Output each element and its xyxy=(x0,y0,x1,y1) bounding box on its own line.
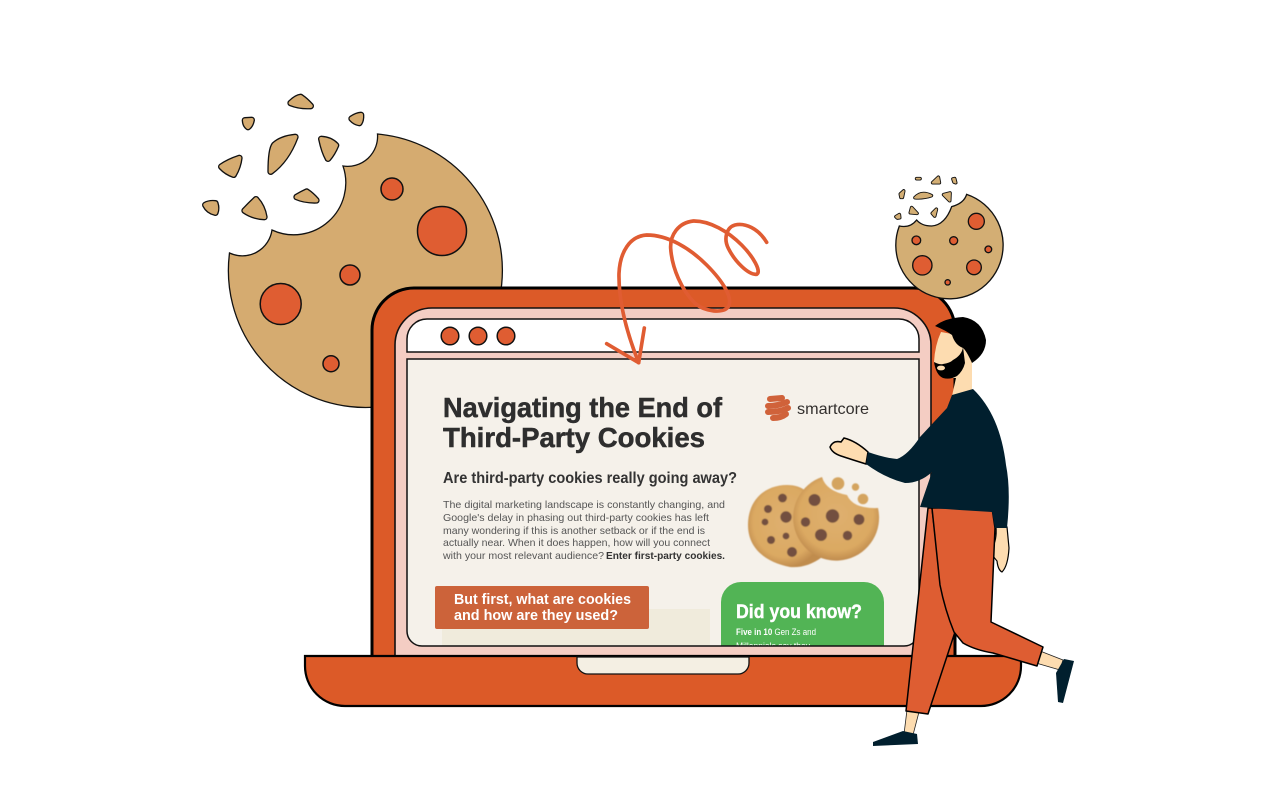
button shape xyxy=(435,586,649,629)
button text: and how are they used? xyxy=(454,608,618,624)
card text xyxy=(736,628,816,646)
card background xyxy=(721,582,884,646)
neck and face xyxy=(934,332,972,396)
cookies photo xyxy=(748,477,879,567)
rear ankle xyxy=(904,710,919,735)
browser bar xyxy=(407,319,919,352)
hair xyxy=(935,317,986,363)
smartcore logo xyxy=(768,398,869,418)
back cookie chips xyxy=(762,494,797,557)
beard xyxy=(934,347,965,379)
card text: Five in 10 Gen Zs and xyxy=(736,627,816,637)
screen bezel xyxy=(395,308,931,656)
beige section backdrop xyxy=(442,609,710,649)
back hand xyxy=(830,438,868,464)
rear shoe xyxy=(873,731,918,746)
subheading: Are third-party cookies really going away? xyxy=(443,470,737,487)
card text: Millennials say they xyxy=(736,641,810,651)
laptop base xyxy=(305,656,1021,706)
laptop xyxy=(305,288,1021,706)
card heading: Did you know? xyxy=(736,601,862,623)
intro paragraph: with your most relevant audience? xyxy=(442,551,604,562)
intro paragraph: many wondering if this is another setback or if the end is xyxy=(443,526,705,537)
webpage content xyxy=(435,392,884,660)
front cookie chips xyxy=(801,494,864,541)
intro paragraph xyxy=(442,500,725,562)
lowered hand xyxy=(992,527,1009,572)
person xyxy=(830,317,1074,746)
intro paragraph: Enter first-party cookies. xyxy=(606,551,725,562)
small cookie chips xyxy=(912,213,992,285)
logo mark xyxy=(768,398,788,418)
small cookie crumbs xyxy=(896,177,956,218)
page title: Third-Party Cookies xyxy=(443,422,705,453)
intro paragraph: The digital marketing landscape is constantly changing, and xyxy=(443,500,725,511)
button text: But first, what are cookies xyxy=(454,592,631,608)
webpage panel outline xyxy=(407,359,919,646)
webpage panel xyxy=(407,359,919,646)
big cookie chips xyxy=(260,178,466,372)
illustration: laptop with cookies and presenter xyxy=(202,94,1074,746)
photo crumbs xyxy=(832,477,868,504)
big cookie body xyxy=(228,134,502,407)
page title: Navigating the End of xyxy=(443,392,723,423)
page title xyxy=(443,392,723,453)
arrow: squiggle pointing to the screen xyxy=(607,221,767,363)
mouth highlight xyxy=(937,366,945,370)
button text xyxy=(454,592,631,624)
intro paragraph: Google's delay in phasing out third-party cookies has left xyxy=(443,513,709,524)
heading button xyxy=(435,586,710,649)
intro paragraph: actually near. When it does happen, how will you connect xyxy=(443,538,710,549)
back cookie xyxy=(748,485,822,567)
did you know card xyxy=(721,582,884,646)
big cookie xyxy=(205,97,502,407)
laptop lid xyxy=(372,288,955,657)
browser dots xyxy=(441,327,515,345)
logo wordmark: smartcore xyxy=(797,401,869,418)
rear trouser leg xyxy=(906,508,955,714)
front cookie xyxy=(793,477,879,561)
small cookie xyxy=(896,177,1003,299)
front shoe xyxy=(1056,659,1074,703)
sweater xyxy=(866,389,1009,528)
small cookie body xyxy=(896,177,1003,299)
front trouser leg xyxy=(932,508,1043,666)
trackpad notch xyxy=(577,657,749,674)
big cookie crumbs xyxy=(205,97,361,217)
front ankle xyxy=(1036,651,1063,670)
